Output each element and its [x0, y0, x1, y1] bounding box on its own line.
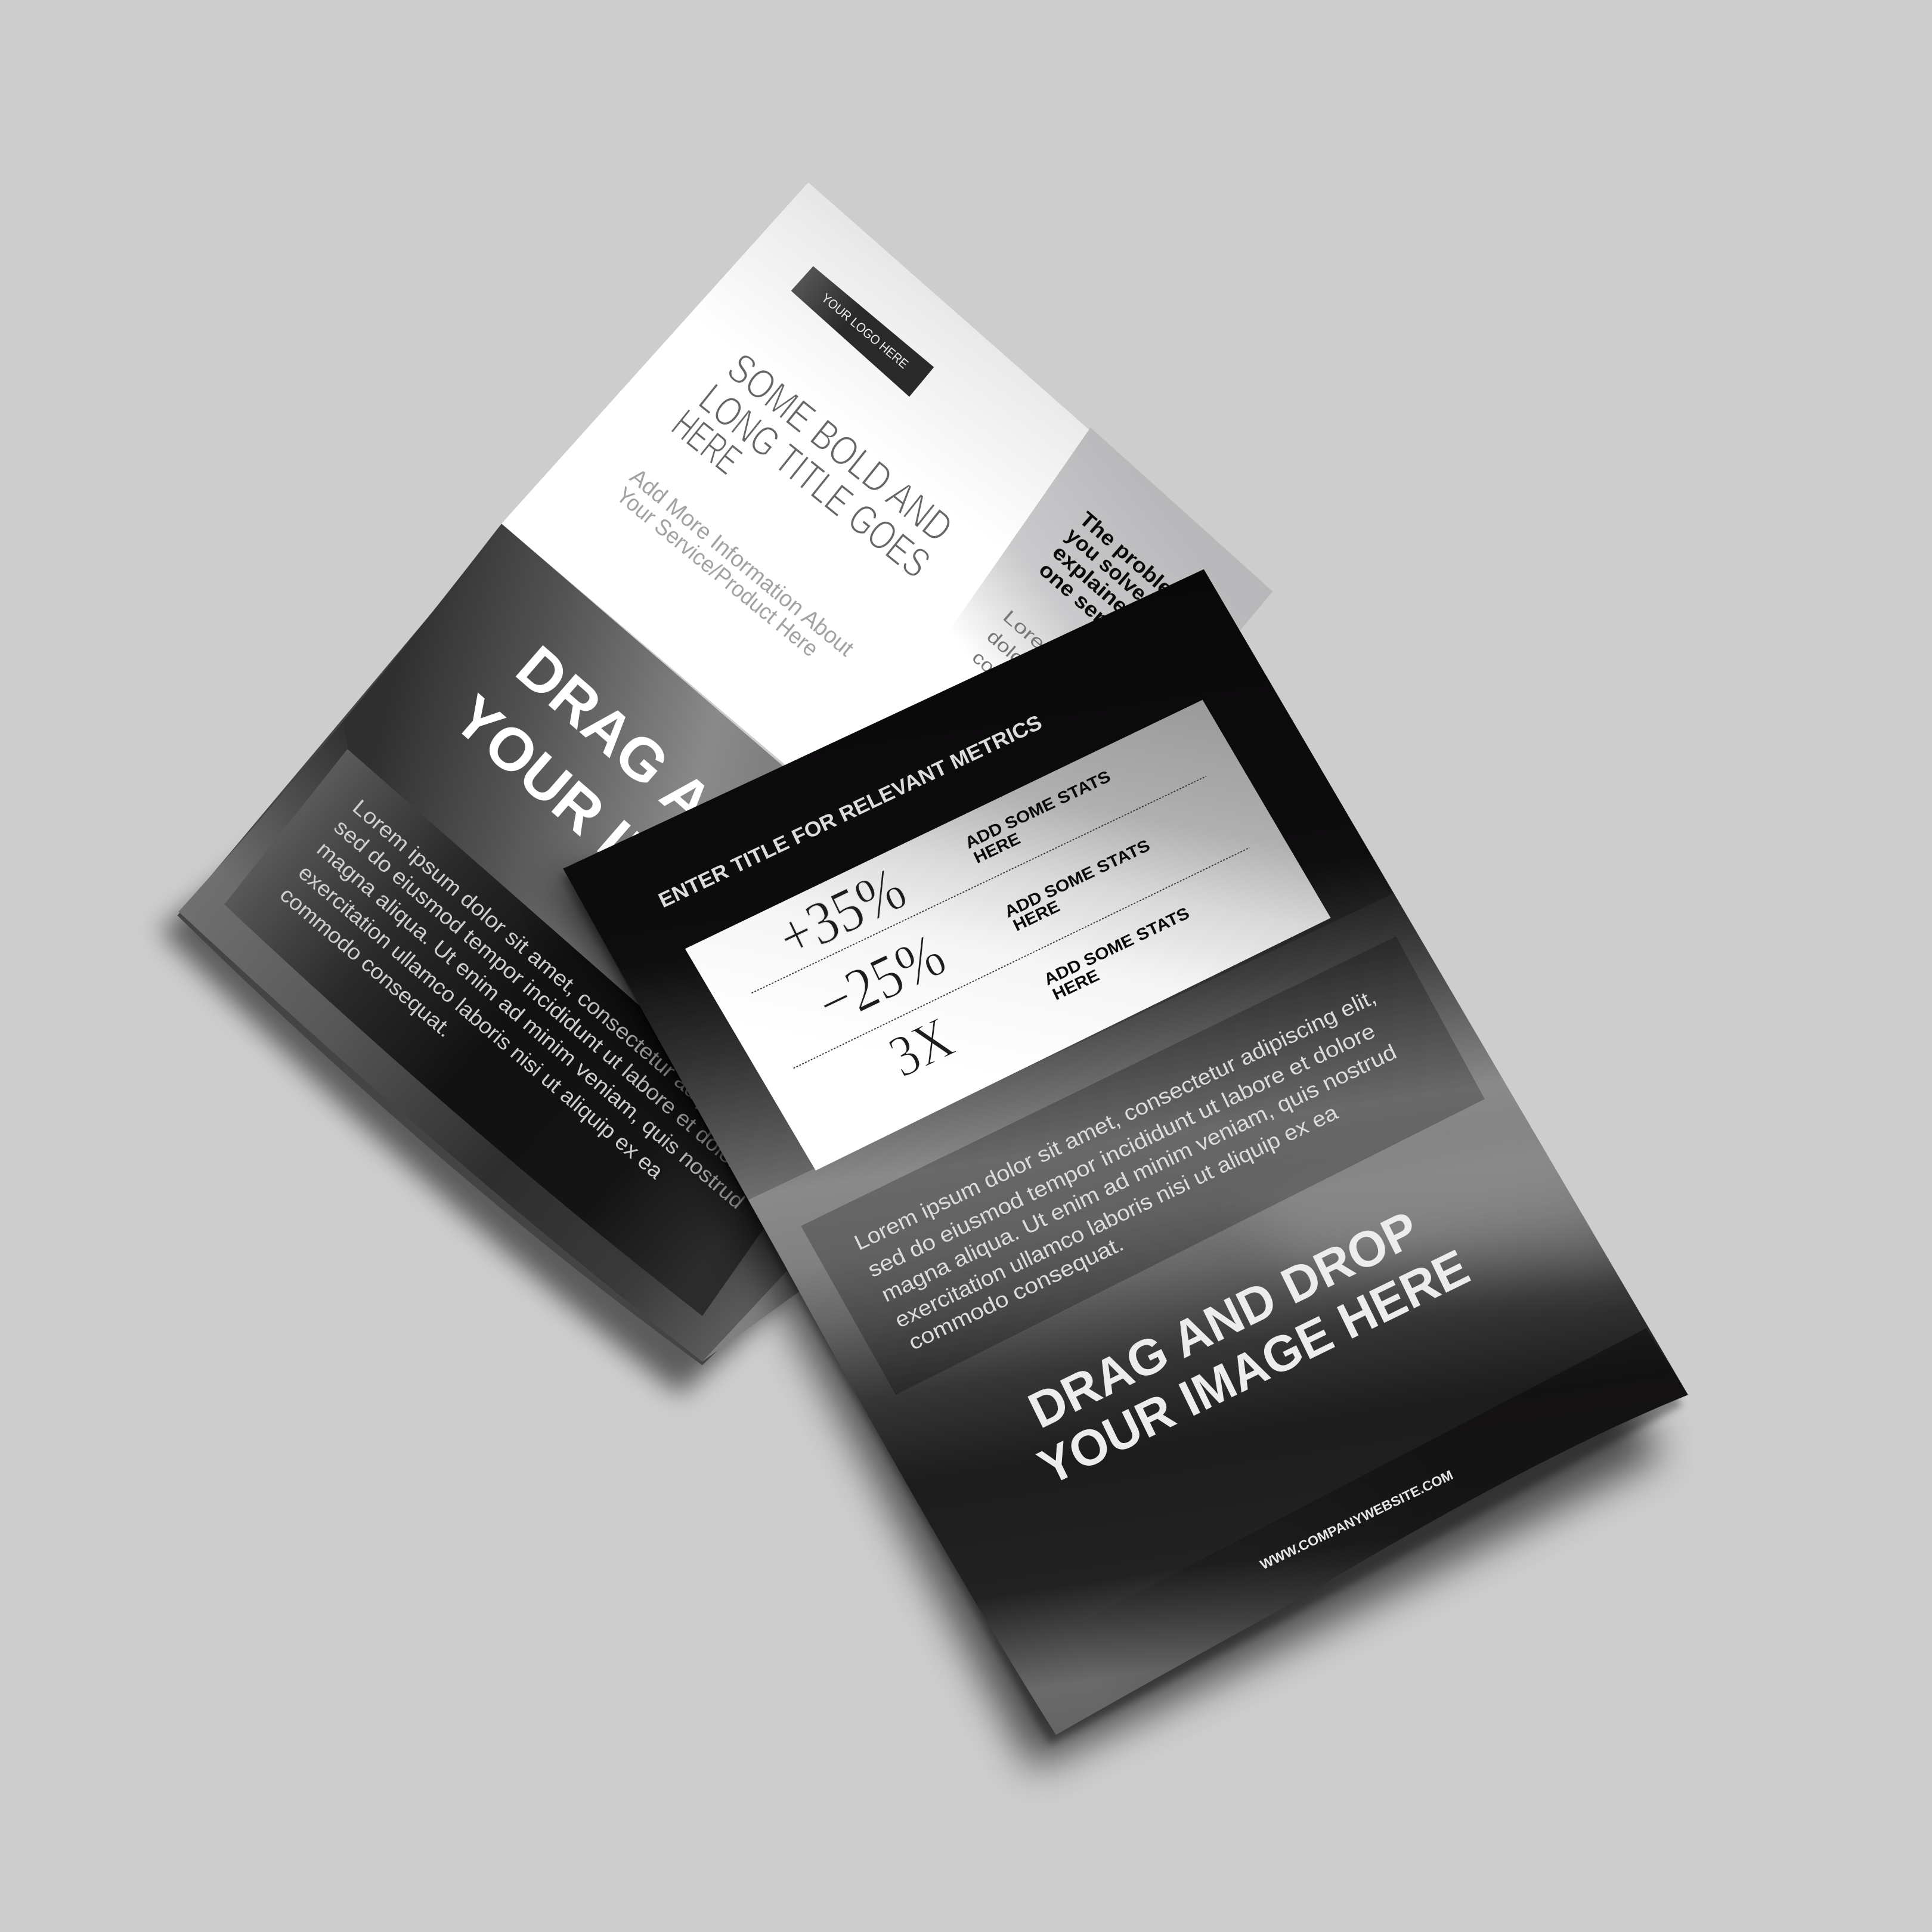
- back body text: commodo consequat.: [275, 882, 457, 1042]
- problem statement: [1035, 507, 1193, 671]
- back flyer: [160, 182, 1273, 1395]
- metric: 3X: ADD SOME STATS: [1041, 903, 1192, 989]
- back flyer text box: [224, 749, 813, 1316]
- title: [664, 343, 962, 587]
- problem statement: you solve: [1061, 524, 1151, 605]
- back flyer image placeholder: [179, 524, 838, 1361]
- front body text: [850, 984, 1400, 1355]
- metric: -25%: ADD SOME STATS: [1001, 836, 1153, 921]
- side panel body text: consequat tempor: [968, 646, 1112, 776]
- back flyer paper edge: [178, 530, 788, 1365]
- logo box: YOUR LOGO HERE: [819, 290, 911, 371]
- footer band tint: [1025, 1329, 1688, 1735]
- front body text: exercitation ullamco laboris nisi ut aliquip ex ea: [891, 1100, 1342, 1333]
- front text box: [801, 936, 1485, 1395]
- metric: +35%: +35%: [767, 854, 916, 972]
- back headline: DRAG AND DROP: [504, 633, 934, 1019]
- website: WWW.COMPANYWEBSITE.COM: [1258, 1467, 1456, 1572]
- top band tint: [563, 569, 1394, 1202]
- back body text: [275, 794, 797, 1213]
- title: HERE: [664, 400, 751, 483]
- side panel body text: dolor consectetur: [983, 626, 1127, 754]
- side panel body text: [968, 606, 1143, 776]
- back flyer shadow: [160, 764, 788, 1395]
- metric: 3X: [880, 903, 1192, 1090]
- problem statement: The problem: [1075, 507, 1193, 614]
- metric dividers: [751, 776, 1249, 1069]
- back body text: magna aliqua. Ut enim ad minim veniam, quis nostrud: [312, 837, 750, 1213]
- metrics panel: [685, 700, 1331, 1171]
- back body text: Lorem ipsum dolor sit amet, consectetur adipiscing elit,: [348, 794, 797, 1182]
- metric: 3X: 3X: [880, 1005, 963, 1090]
- subtitle: Add More Information About: [625, 463, 859, 661]
- metrics title: ENTER TITLE FOR RELEVANT METRICS: [655, 711, 1045, 912]
- front body text: Lorem ipsum dolor sit amet, consectetur adipiscing elit,: [850, 984, 1380, 1255]
- back flyer left strip fade: [179, 722, 348, 912]
- front body text: commodo consequat.: [905, 1231, 1128, 1355]
- front flyer sheet: [563, 569, 1688, 1735]
- logo box: [791, 266, 934, 397]
- metric: -25%: HERE: [1010, 897, 1063, 935]
- front flyer shadow: [551, 862, 1664, 1769]
- metric: -25%: −25%: [807, 921, 955, 1039]
- back body text: exercitation ullamco laboris nisi ut aliquip ex ea: [294, 860, 668, 1184]
- front headline: YOUR IMAGE HERE: [1030, 1239, 1478, 1496]
- back flyer lower strip: [179, 722, 813, 1361]
- problem statement: one sentence: [1035, 558, 1159, 671]
- subtitle: Your Service/Product Here: [611, 482, 823, 662]
- front headline: DRAG AND DROP: [1020, 1200, 1427, 1439]
- back flyer white section: [501, 182, 1273, 788]
- metric: +35%: [767, 767, 1113, 972]
- title: SOME BOLD AND: [719, 343, 962, 552]
- back flyer grey side panel: [881, 428, 1273, 788]
- metric: +35%: HERE: [971, 829, 1023, 867]
- front flyer: [551, 569, 1688, 1769]
- metric: 3X: HERE: [1049, 966, 1102, 1004]
- back body text: sed do eiusmod tempor incididunt ut labore et dolore: [330, 815, 756, 1182]
- side panel body text: Lorem ipsum sit: [999, 606, 1143, 735]
- sheet highlight: [1244, 1146, 1651, 1269]
- metric: -25%: [807, 836, 1153, 1039]
- metric: +35%: ADD SOME STATS: [962, 767, 1113, 852]
- title: LONG TITLE GOES: [691, 374, 939, 587]
- problem statement: explained in: [1048, 540, 1163, 645]
- front flyer contact shadow: [561, 875, 1683, 1745]
- front body text: magna aliqua. Ut enim ad minim veniam, quis nostrud: [877, 1039, 1400, 1306]
- back headline: YOUR IMAGE HERE: [441, 682, 918, 1109]
- front body text: sed do eiusmod tempor incididunt ut labore et dolore: [864, 1018, 1379, 1282]
